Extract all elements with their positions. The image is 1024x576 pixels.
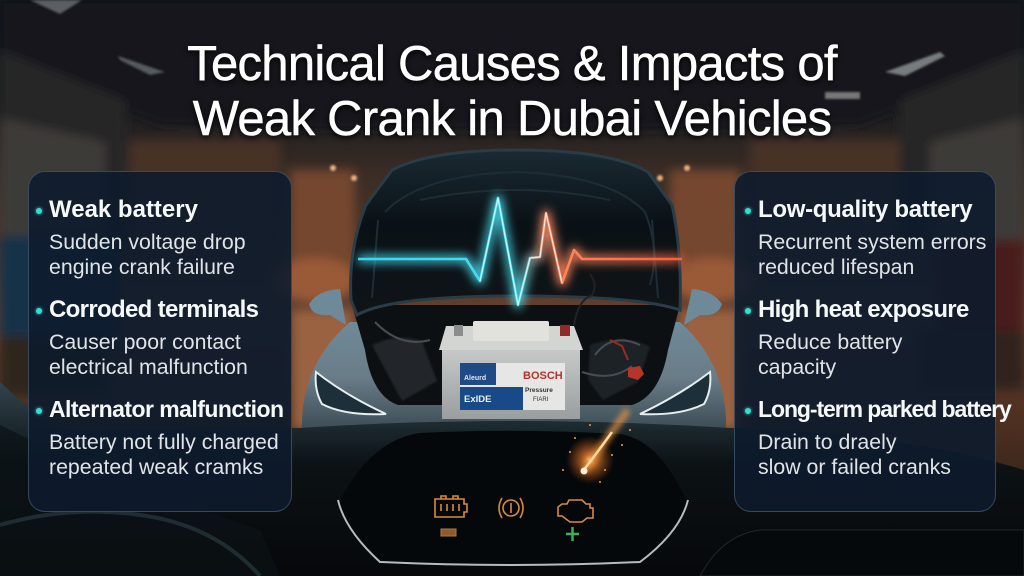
- cause: corroded terminals: electrical malfunction: [49, 355, 248, 379]
- background scene: garage, car and dashboard: Aleurd: [464, 375, 486, 382]
- background scene: garage, car and dashboard: FIARI: [533, 397, 549, 403]
- impact: high heat exposure: [743, 296, 969, 379]
- impact: low-quality battery: reduced lifespan: [758, 255, 914, 279]
- panel: impacts: [734, 171, 996, 512]
- car body: [302, 322, 726, 430]
- cause: corroded terminals: [34, 296, 258, 379]
- impact: high heat exposure: High heat exposure: [758, 296, 969, 323]
- background scene: garage, car and dashboard: Pressure: [525, 387, 553, 394]
- cause: weak battery: engine crank failure: [49, 255, 235, 279]
- impact: long-term parked battery: Long-term parked battery: [758, 396, 1011, 422]
- side mirrors: [309, 289, 346, 325]
- impact: long-term parked battery: slow or failed cranks: [758, 455, 951, 479]
- headlights: [316, 372, 386, 414]
- panel: causes: [28, 171, 292, 512]
- cause: weak battery: Sudden voltage drop: [49, 230, 246, 254]
- cause: alternator malfunction: repeated weak cramks: [49, 455, 263, 479]
- impact: low-quality battery: [742, 196, 986, 279]
- background scene: garage, car and dashboard: BOSCH: [523, 370, 563, 382]
- impact: low-quality battery: Recurrent system errors: [758, 230, 986, 254]
- impact: high heat exposure: Reduce battery: [758, 330, 902, 354]
- spark: [566, 436, 614, 484]
- warning icons: [435, 496, 593, 536]
- heartbeat line: [358, 198, 682, 305]
- battery: [442, 345, 580, 419]
- hood: [351, 150, 680, 315]
- impact: low-quality battery: Low-quality battery: [758, 196, 972, 223]
- dashboard: [0, 382, 1024, 576]
- impact: long-term parked battery: Drain to draely: [758, 430, 896, 454]
- cause: corroded terminals: Corroded terminals: [49, 296, 258, 323]
- cause: alternator malfunction: Battery not fully charged: [49, 430, 279, 454]
- impact: high heat exposure: capacity: [758, 355, 836, 379]
- cause: weak battery: Weak battery: [49, 196, 198, 223]
- impact: long-term parked battery: [742, 396, 1012, 479]
- background scene: garage, car and dashboard: ExIDE: [464, 394, 491, 405]
- cause: corroded terminals: Causer poor contact: [49, 330, 241, 354]
- title: [187, 37, 838, 146]
- title: Weak Crank in Dubai Vehicles: [193, 92, 831, 146]
- cause: weak battery: [34, 196, 246, 279]
- title: Technical Causes & Impacts of: [187, 37, 837, 91]
- cause: alternator malfunction: [34, 396, 284, 479]
- cause: alternator malfunction: Alternator malfunction: [49, 396, 284, 422]
